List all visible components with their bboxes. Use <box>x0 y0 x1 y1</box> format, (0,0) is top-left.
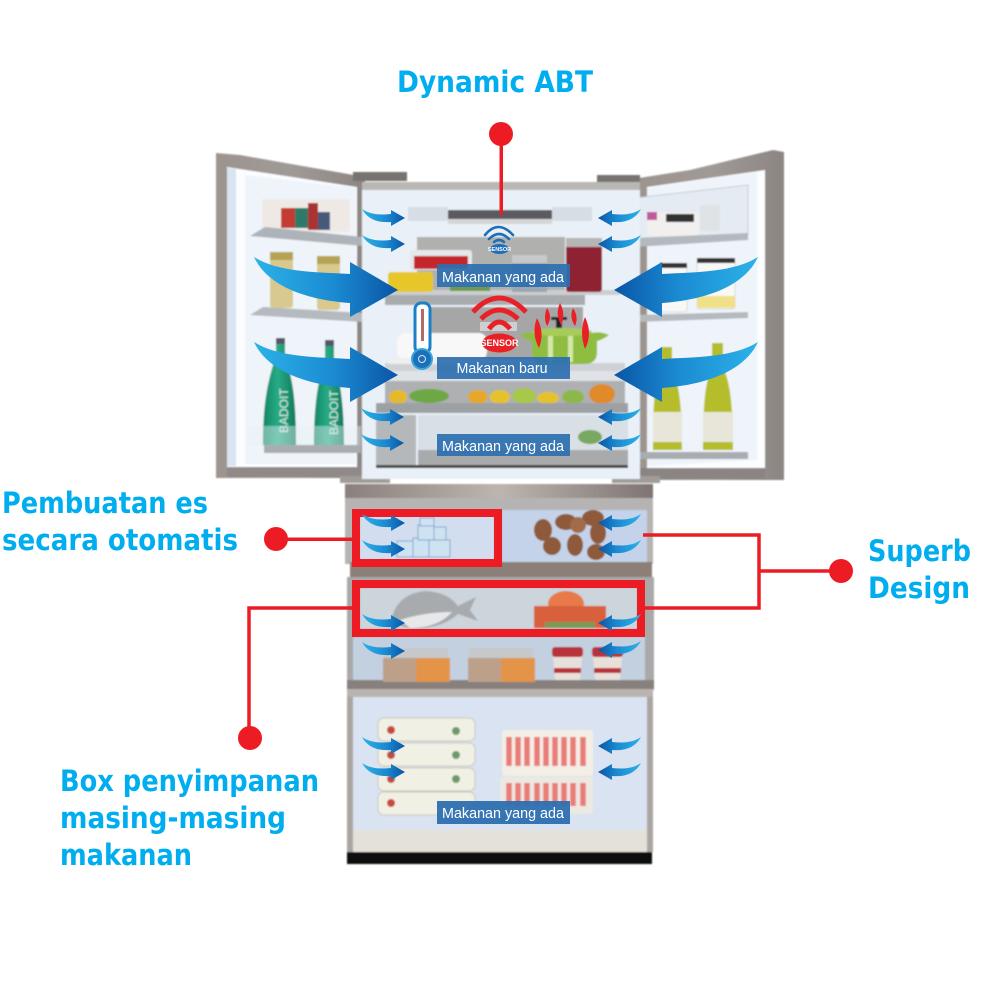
heading: Superb Design: Superb <box>868 534 971 568</box>
right door <box>635 150 784 480</box>
label: Makanan baru <box>437 357 570 379</box>
upper shelf <box>385 290 620 295</box>
left door middle shelf with cans <box>250 252 363 322</box>
highlight: ice drawer box <box>356 513 498 563</box>
callout line: storage box <box>238 608 352 750</box>
food: nuts <box>534 510 606 560</box>
large arrow lower right <box>614 342 758 402</box>
right door lower shelf with wine <box>635 343 748 459</box>
left door top shelf with packaged food <box>250 199 363 246</box>
large arrow upper left <box>254 257 398 317</box>
food: frozen section and drawer backgrounds <box>345 484 654 864</box>
fridge cabinet interior <box>362 182 640 479</box>
large arrow upper right <box>614 257 758 317</box>
hinges <box>340 172 660 483</box>
heading: Pembuatan es secara otomatis <box>2 486 238 557</box>
label: Makanan yang ada (upper): Makanan yang ada <box>442 269 565 286</box>
panel: refrigerator <box>216 150 784 864</box>
callout line: automatic ice <box>264 527 352 551</box>
food: ice cream tubs <box>552 647 623 680</box>
heading: Box penyimpanan masing-masing makanan: makanan <box>60 838 192 872</box>
right door top shelf <box>635 185 748 247</box>
crisper shelf and drawer <box>376 403 628 413</box>
heading: Box penyimpanan masing-masing makanan: Box penyimpanan <box>60 764 319 798</box>
food: fish <box>392 591 478 628</box>
heading: Superb Design <box>868 534 971 605</box>
icon: red sensor <box>473 298 526 352</box>
white food tray <box>388 333 488 364</box>
small arrows left of cabinet <box>361 209 405 451</box>
left door lower shelf with green bottles: BADOIT <box>327 390 341 435</box>
food: egg cartons <box>378 718 475 815</box>
display panel <box>448 210 552 219</box>
heading: Box penyimpanan masing-masing makanan: masing-masing <box>60 801 286 835</box>
icon: blue sensor <box>485 227 513 254</box>
highlight: storage drawer box <box>356 584 641 633</box>
food: frozen boxes <box>383 648 535 682</box>
right door middle shelf <box>636 258 748 322</box>
label: Makanan yang ada (lower): Makanan yang ada <box>442 438 565 455</box>
icon: blue sensor: SENSOR <box>488 247 511 253</box>
left door lower shelf with green bottles <box>248 338 361 453</box>
airflow arrows <box>254 209 758 451</box>
left door lower shelf with green bottles: BADOIT <box>277 388 291 433</box>
icon: steam above pot <box>534 303 589 349</box>
label: Makanan baru: Makanan baru <box>456 360 548 377</box>
heading: Superb Design: Design <box>868 571 970 605</box>
icon: thermometer <box>412 303 432 369</box>
heading: Box penyimpanan masing-masing makanan <box>60 764 319 872</box>
small arrows right of cabinet <box>598 209 641 451</box>
food: ice cubes <box>397 518 450 557</box>
callout: Dynamic ABT marker <box>489 122 513 215</box>
food: shrimp trays <box>500 730 593 814</box>
food containers on upper shelf <box>388 238 602 292</box>
left door <box>216 153 365 478</box>
small arrows right of drawers <box>598 514 641 780</box>
callout line: superb design <box>643 535 853 608</box>
large arrow lower left <box>254 342 398 402</box>
middle shelf <box>385 363 625 371</box>
food: crab <box>534 591 606 628</box>
heading: Pembuatan es secara otomatis: Pembuatan es <box>2 486 208 520</box>
icon: cooking pot <box>520 317 609 364</box>
small arrows left of drawers <box>362 514 405 780</box>
icon: red sensor: SENSOR <box>480 338 519 348</box>
crisper fruit <box>389 384 615 404</box>
label: Makanan yang ada (bottom): Makanan yang ada <box>442 805 565 822</box>
heading: Pembuatan es secara otomatis: secara otomatis <box>2 523 238 557</box>
title: Dynamic ABT: Dynamic ABT <box>397 65 593 99</box>
